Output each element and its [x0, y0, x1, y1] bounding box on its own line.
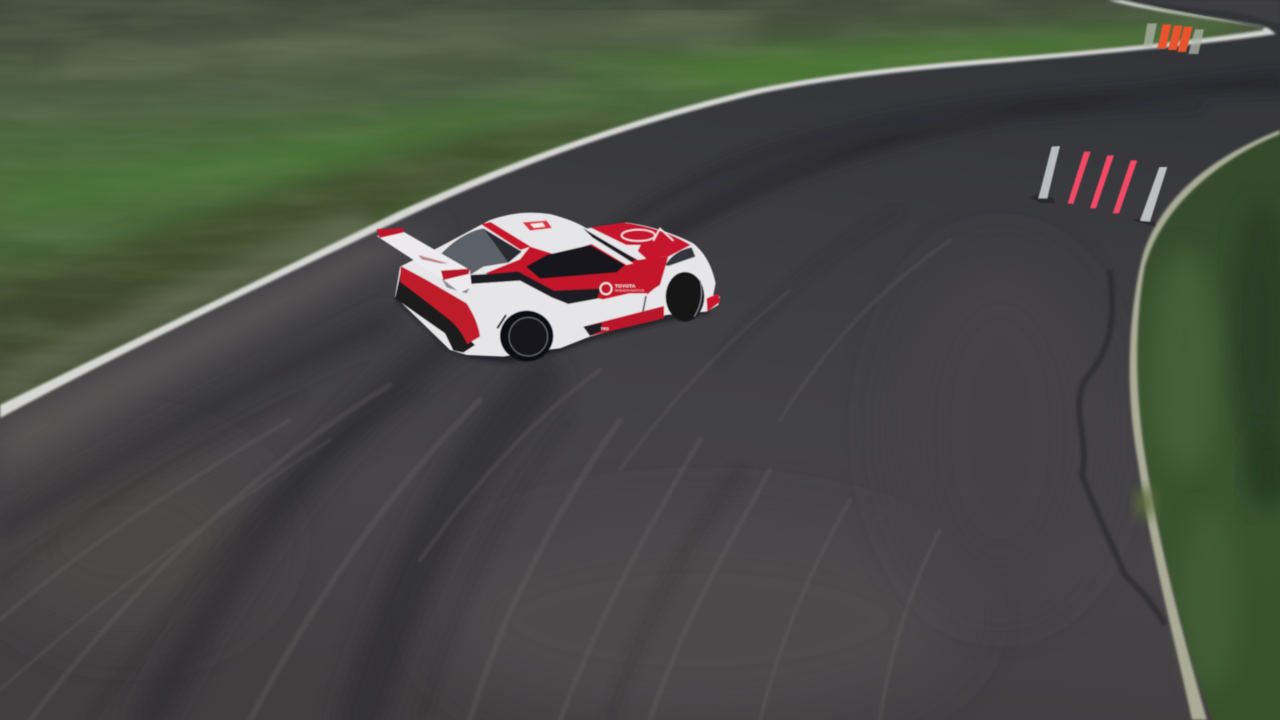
white body shell	[395, 213, 720, 357]
pylon left	[1030, 146, 1060, 203]
hood red	[590, 223, 691, 295]
track edge curb right	[1130, 130, 1280, 720]
door sponsor logo: TOYOTA	[615, 283, 636, 289]
rear glass	[440, 228, 522, 275]
roof red stripe	[481, 222, 531, 250]
car shadow	[395, 283, 710, 363]
rear fascia black	[395, 267, 475, 353]
race car	[377, 213, 720, 363]
red bar 3	[1113, 160, 1137, 213]
door sponsor logo: RESEARCH INSTITUTE	[615, 288, 644, 292]
pylon right	[1132, 167, 1167, 227]
grass infield left	[0, 0, 1280, 420]
side window	[526, 245, 625, 279]
dark road beyond the top right edge	[1125, 0, 1280, 24]
white track edge line left	[0, 0, 1276, 418]
door sponsor logo	[600, 283, 644, 294]
white hood panel	[623, 245, 641, 257]
red side band	[485, 244, 658, 299]
asphalt crack	[1079, 270, 1165, 625]
hood intake	[665, 247, 695, 266]
side skirt: TRD	[601, 326, 609, 331]
red bar 2	[1090, 155, 1114, 208]
broadcast logo top right	[1143, 23, 1204, 54]
grass verge right	[1136, 132, 1280, 720]
hood logo	[622, 230, 655, 241]
front wheel	[666, 272, 704, 321]
rear wheel	[500, 311, 553, 361]
roof logo	[523, 221, 552, 231]
rear wing	[377, 228, 472, 293]
front splitter	[707, 293, 720, 312]
rear vent	[497, 315, 506, 328]
side skirt	[583, 306, 664, 336]
door seam	[643, 296, 646, 313]
pylons and red light bars	[1030, 146, 1167, 227]
lower black band	[469, 271, 601, 304]
red bar 1	[1068, 152, 1091, 204]
windshield	[583, 228, 636, 262]
rear red panel	[400, 266, 480, 344]
